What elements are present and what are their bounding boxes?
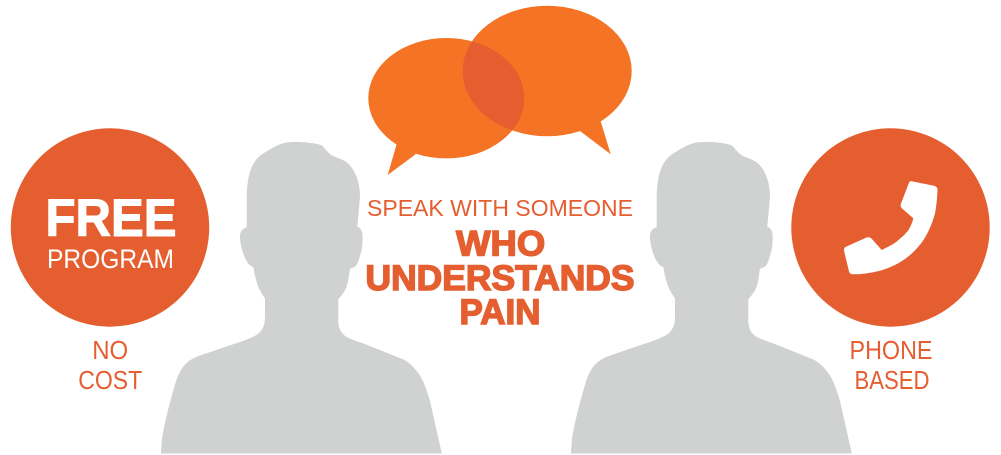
silhouette: left person	[161, 142, 442, 453]
message emphasis: UNDERSTANDS	[366, 259, 634, 298]
message intro: SPEAK WITH SOMEONE	[367, 195, 633, 221]
caption: phone based: PHONE	[850, 337, 932, 365]
speech bubble: left	[368, 38, 524, 175]
caption: no cost: COST	[78, 367, 142, 395]
icon: telephone handset	[844, 181, 938, 274]
message emphasis: WHO	[456, 224, 545, 264]
caption: no cost	[78, 337, 142, 395]
central message	[366, 195, 634, 332]
bubble overlap	[462, 42, 524, 130]
message emphasis	[366, 224, 634, 332]
caption: phone based: BASED	[854, 367, 930, 395]
badge: phone	[791, 128, 990, 327]
badge heading: FREE	[46, 189, 176, 248]
silhouette: right person	[571, 142, 852, 453]
speech bubble: right	[463, 6, 632, 154]
badge: free program	[11, 128, 209, 327]
caption: phone based	[850, 337, 932, 395]
icon: overlapping speech bubbles	[368, 6, 632, 175]
badge circle	[791, 128, 990, 327]
message emphasis: PAIN	[460, 293, 540, 332]
caption: no cost: NO	[92, 337, 128, 365]
badge circle	[11, 128, 209, 327]
badge subheading: PROGRAM	[47, 244, 174, 274]
